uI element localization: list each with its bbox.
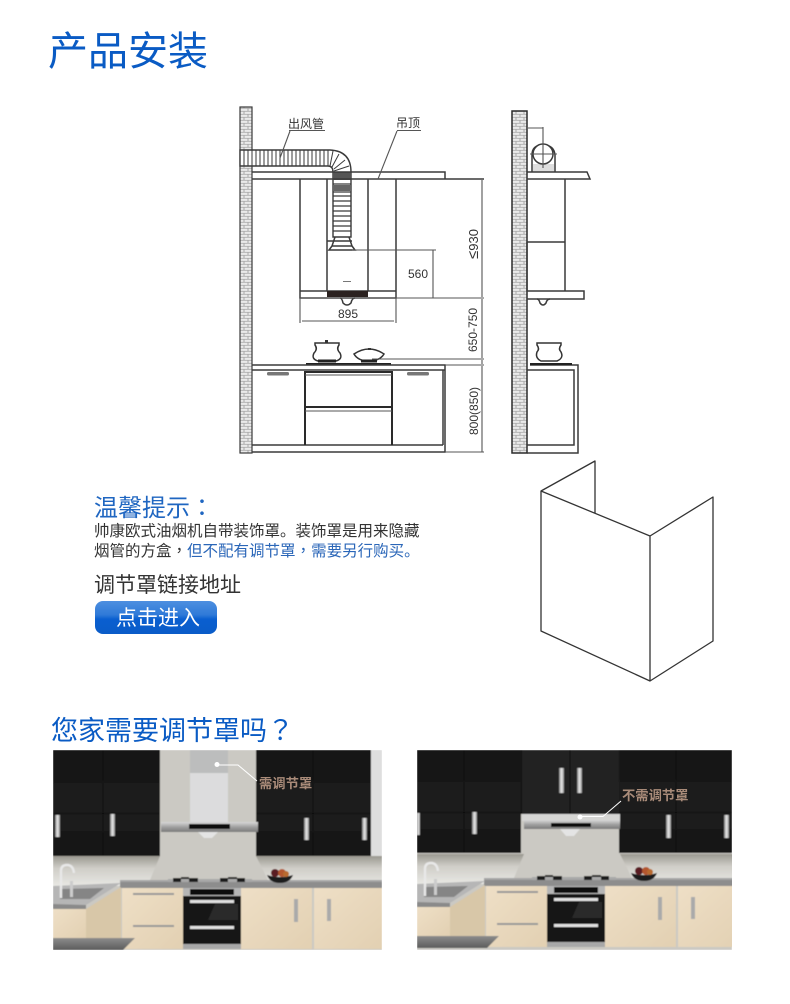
photo: kitchen needing adjustment cover (53, 750, 382, 950)
front elevation installation diagram (240, 107, 484, 453)
side brick wall (512, 111, 527, 453)
label: air duct (280, 116, 325, 158)
exhaust duct (240, 150, 355, 250)
dimension 560: 560 (408, 267, 428, 281)
height dimension lines (372, 180, 484, 452)
link label: 调节罩链接地址 (94, 574, 241, 597)
callout: needs adjustment cover: 需调节罩 (259, 775, 312, 791)
tip text: 烟管的方盒，但不配有调节罩，需要另行购买。 (94, 539, 420, 561)
brick wall (240, 107, 252, 453)
label: ceiling: 吊顶 (396, 116, 420, 130)
callout: no adjustment cover needed (578, 787, 688, 820)
tip text: 帅康欧式油烟机自带装饰罩。装饰罩是用来隐藏 (94, 522, 420, 540)
button: enter: 点击进入 (116, 607, 200, 630)
side cabinet (527, 364, 578, 453)
title: 产品安装 (48, 30, 208, 74)
base cabinets (252, 365, 445, 452)
icon: decorative cover box (541, 461, 713, 681)
section heading: 您家需要调节罩吗？ (51, 709, 294, 748)
tip text (94, 522, 420, 561)
duct cross-section (528, 127, 557, 172)
side elevation installation diagram (512, 111, 590, 453)
side ceiling, cover and hood (527, 172, 590, 305)
pots and hob (306, 340, 391, 364)
callout: no adjustment cover needed: 不需调节罩 (622, 787, 688, 803)
height dimension lines: ≤930 (465, 229, 482, 259)
dimension 895: 895 (338, 307, 358, 321)
decorative cover and range hood (300, 179, 484, 323)
tip heading: 温馨提示： (94, 488, 214, 523)
label: ceiling (378, 116, 421, 179)
photo: kitchen not needing adjustment cover (417, 750, 746, 950)
height dimension lines: 800(850) (467, 387, 481, 435)
height dimension lines: 650-750 (466, 308, 480, 352)
side pot (536, 343, 562, 361)
label: air duct: 出风管 (288, 116, 324, 131)
button: enter (95, 601, 217, 634)
callout: needs adjustment cover (214, 762, 312, 791)
ceiling (252, 172, 484, 179)
